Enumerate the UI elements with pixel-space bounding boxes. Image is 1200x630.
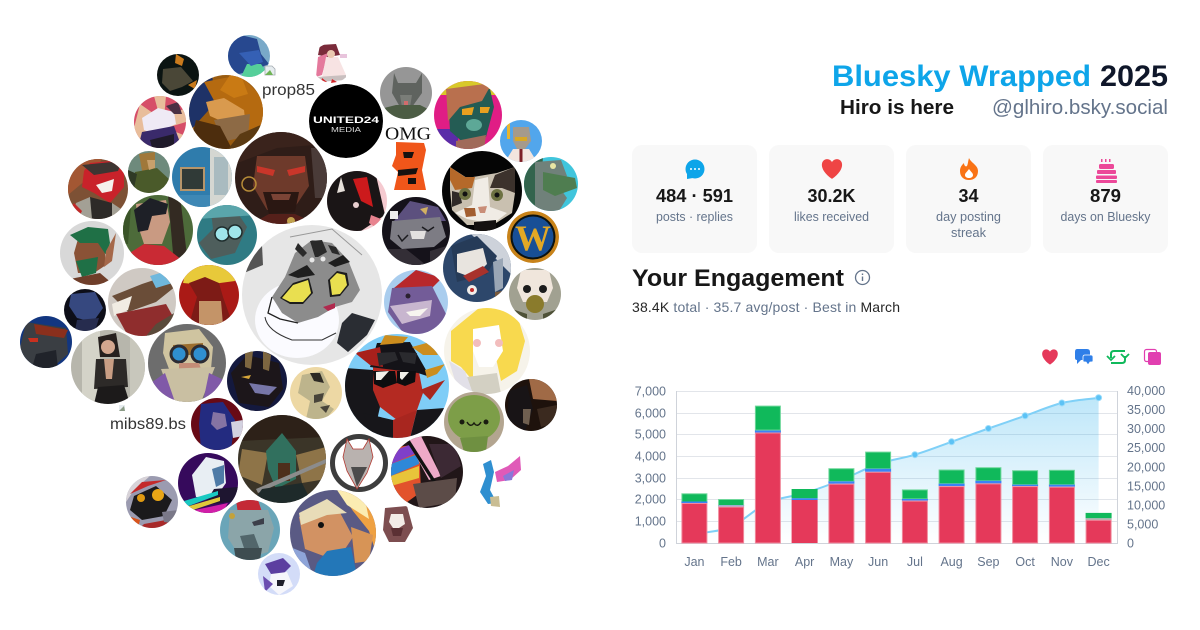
icon: comment bubble: [686, 160, 704, 179]
avatar: hooded white beast with backpack: [443, 234, 511, 302]
avatar: gray-striped cat: [242, 225, 382, 365]
avatar: gas mask figure: [509, 268, 561, 320]
month labels: Oct: [1015, 555, 1035, 569]
icon: broken image near mibs89: [119, 405, 125, 411]
avatar: teal creature: [197, 205, 257, 265]
bar: May: [828, 469, 854, 543]
stacked bars: [681, 406, 1112, 543]
avatar: pink character: [316, 44, 347, 83]
avatar: tan lion sketch: [290, 367, 342, 419]
icon: birthday cake: [1096, 159, 1117, 183]
avatar: blue dragon: [228, 35, 270, 77]
month labels: Nov: [1051, 555, 1074, 569]
avatar: blue building with chalkboard: [172, 147, 232, 207]
avatar: sleepy wolf in wizard hat: [382, 197, 450, 265]
stat value: 484 · 591: [656, 186, 733, 206]
avatar: UNITED24 media logo: [309, 84, 383, 158]
icon: reply bubbles: [1075, 349, 1093, 365]
right axis labels: 15,000: [1127, 480, 1165, 494]
cumulative area: [694, 398, 1099, 543]
avatar: white lion with stats: [178, 453, 238, 513]
bar: Feb: [718, 500, 744, 543]
bar: Dec: [1086, 513, 1112, 543]
month labels: Dec: [1087, 555, 1110, 569]
left axis labels: 7,000: [635, 384, 666, 398]
avatar: dwarf with goggles: [148, 324, 226, 402]
right axis labels: 30,000: [1127, 422, 1165, 436]
icon: like heart: [1042, 349, 1058, 365]
avatar: dark dragon: [157, 54, 199, 96]
bar: Jan: [681, 494, 707, 543]
icon: info: [856, 270, 870, 284]
avatar: woman in mirror selfie: [71, 330, 145, 404]
stat value: 34: [958, 186, 978, 206]
right axis labels: [1127, 384, 1165, 550]
title: Bluesky Wrapped: Bluesky Wrapped: [832, 60, 1091, 93]
icon: broken image near prop85: [265, 66, 275, 75]
stat value: 879: [1090, 186, 1121, 206]
avatar: UNITED24 media logo: MEDIA: [331, 125, 361, 134]
bar: Nov: [1049, 470, 1075, 543]
avatar: goat skull: [134, 96, 186, 148]
right axis labels: 5,000: [1127, 518, 1158, 532]
avatar: bearded man sketch: [377, 504, 417, 544]
gridlines: [676, 391, 1118, 544]
month labels: Mar: [757, 555, 779, 569]
right axis labels: 40,000: [1127, 384, 1165, 398]
avatar: green monster with dreadlocks: [434, 81, 502, 149]
avatar: bald figure on blue: [500, 120, 542, 162]
cumulative line: [694, 398, 1099, 534]
heading: Your Engagement: Your Engagement: [632, 265, 844, 292]
avatar: dark figure in brown room: [505, 379, 557, 431]
right axis labels: 0: [1127, 536, 1134, 550]
avatar: gray fox mask in ring: [329, 433, 389, 493]
title: [832, 60, 1168, 93]
avatar: comic girl with blonde hair: [290, 490, 376, 576]
bar: Jun: [865, 452, 891, 543]
left axis labels: 0: [659, 536, 666, 550]
left axis labels: 4,000: [635, 450, 666, 464]
avatar: red muscular demon: [179, 265, 239, 325]
bar: Jul: [902, 490, 928, 543]
legend icons: [1042, 349, 1161, 365]
chart: monthly engagement stacked bars with cumulative line: [635, 384, 1165, 569]
panel: days on Bluesky stat card: [1043, 145, 1168, 253]
month labels: Jul: [907, 555, 923, 569]
avatar: UNITED24 media logo: UNITED24: [313, 115, 379, 125]
avatar: lion: [189, 75, 263, 149]
left axis labels: 5,000: [635, 428, 666, 442]
avatar: elf archer: [128, 151, 170, 193]
avatar: feathered dragon: [108, 268, 176, 336]
avatar: dark-skinned man: [235, 132, 327, 225]
avatar: green-haired elf: [60, 221, 124, 285]
avatar: purple and white creature: [258, 553, 300, 595]
icon: heart: [822, 159, 842, 179]
stat label: posts · replies: [656, 210, 733, 224]
avatar: red devil: [68, 159, 128, 219]
stat label: days on Bluesky: [1060, 210, 1151, 224]
panel: posting streak stat card: [906, 145, 1031, 253]
month labels: Apr: [795, 555, 814, 569]
display name: Hiro is here: [840, 97, 954, 119]
month labels: Feb: [720, 555, 742, 569]
bar: Oct: [1012, 471, 1038, 543]
right axis labels: 10,000: [1127, 498, 1165, 512]
avatar: black and red wolf: [327, 171, 387, 231]
avatar: pride flag character: [391, 436, 463, 508]
stat label second line: streak: [951, 226, 987, 240]
stat label: likes received: [794, 210, 869, 224]
engagement summary: 38.4K total · 35.7 avg/post · Best in March: [632, 299, 900, 315]
avatar: World of Warcraft logo: W: [515, 218, 551, 258]
avatar: OMG mario sprite: [385, 124, 431, 190]
avatar: man in forest: [123, 195, 193, 265]
bar: Aug: [939, 470, 965, 543]
left axis labels: 3,000: [635, 472, 666, 486]
month labels: [684, 555, 1110, 569]
icon: quote copies: [1144, 350, 1161, 365]
stat label: day posting: [936, 210, 1001, 224]
right axis labels: 35,000: [1127, 403, 1165, 417]
stat value: 30.2K: [808, 186, 856, 206]
avatar: green dragon warrior: [238, 415, 326, 503]
avatar: World of Warcraft logo: [507, 211, 559, 263]
avatar: armored robot: [20, 316, 72, 368]
panel: posts and replies stat card: [632, 145, 757, 253]
avatar: red man with sunglasses: [345, 334, 449, 438]
month labels: Jun: [868, 555, 888, 569]
left axis labels: [635, 384, 666, 550]
panel: likes stat card: [769, 145, 894, 253]
bar: Sep: [975, 468, 1001, 543]
label: mibs89.bs: mibs89.bs: [110, 416, 186, 433]
month labels: Jan: [684, 555, 705, 569]
label: prop85: prop85: [262, 82, 315, 99]
avatar: calico cat: [442, 151, 522, 231]
avatar: purple hooded figure: [191, 398, 243, 450]
left axis labels: 6,000: [635, 406, 666, 420]
avatar: black horned dragon: [227, 351, 287, 411]
avatar: purple shark in santa hat: [384, 270, 448, 334]
icon: flame: [960, 158, 978, 180]
right axis labels: 25,000: [1127, 441, 1165, 455]
left axis labels: 1,000: [635, 514, 666, 528]
avatar: green plush: [444, 392, 504, 452]
month labels: May: [830, 555, 854, 569]
month labels: Aug: [940, 555, 963, 569]
month labels: Sep: [977, 555, 1000, 569]
avatar: blonde sketch: [444, 308, 530, 394]
avatar: gray wolf: [380, 67, 432, 119]
bar: Apr: [792, 489, 818, 543]
title: year: 2025: [1100, 60, 1168, 93]
avatar: blue storm creature: [64, 289, 106, 331]
text: OMG: OMG: [385, 124, 431, 144]
avatar: black dragon in santa hat: [126, 476, 178, 528]
right axis labels: 20,000: [1127, 460, 1165, 474]
bar: Mar: [755, 406, 781, 543]
icon: repost arrows: [1107, 351, 1129, 363]
handle: @glhiro.bsky.social: [992, 97, 1168, 119]
line points: [912, 395, 1102, 458]
left axis labels: 2,000: [635, 492, 666, 506]
avatar: green t-rex: [524, 157, 578, 211]
panel: avatar bubble cluster: [20, 35, 578, 595]
avatar: blue dragon with bi-pride wing: [480, 456, 521, 507]
avatar: gray wolf in santa hat: [220, 500, 280, 560]
